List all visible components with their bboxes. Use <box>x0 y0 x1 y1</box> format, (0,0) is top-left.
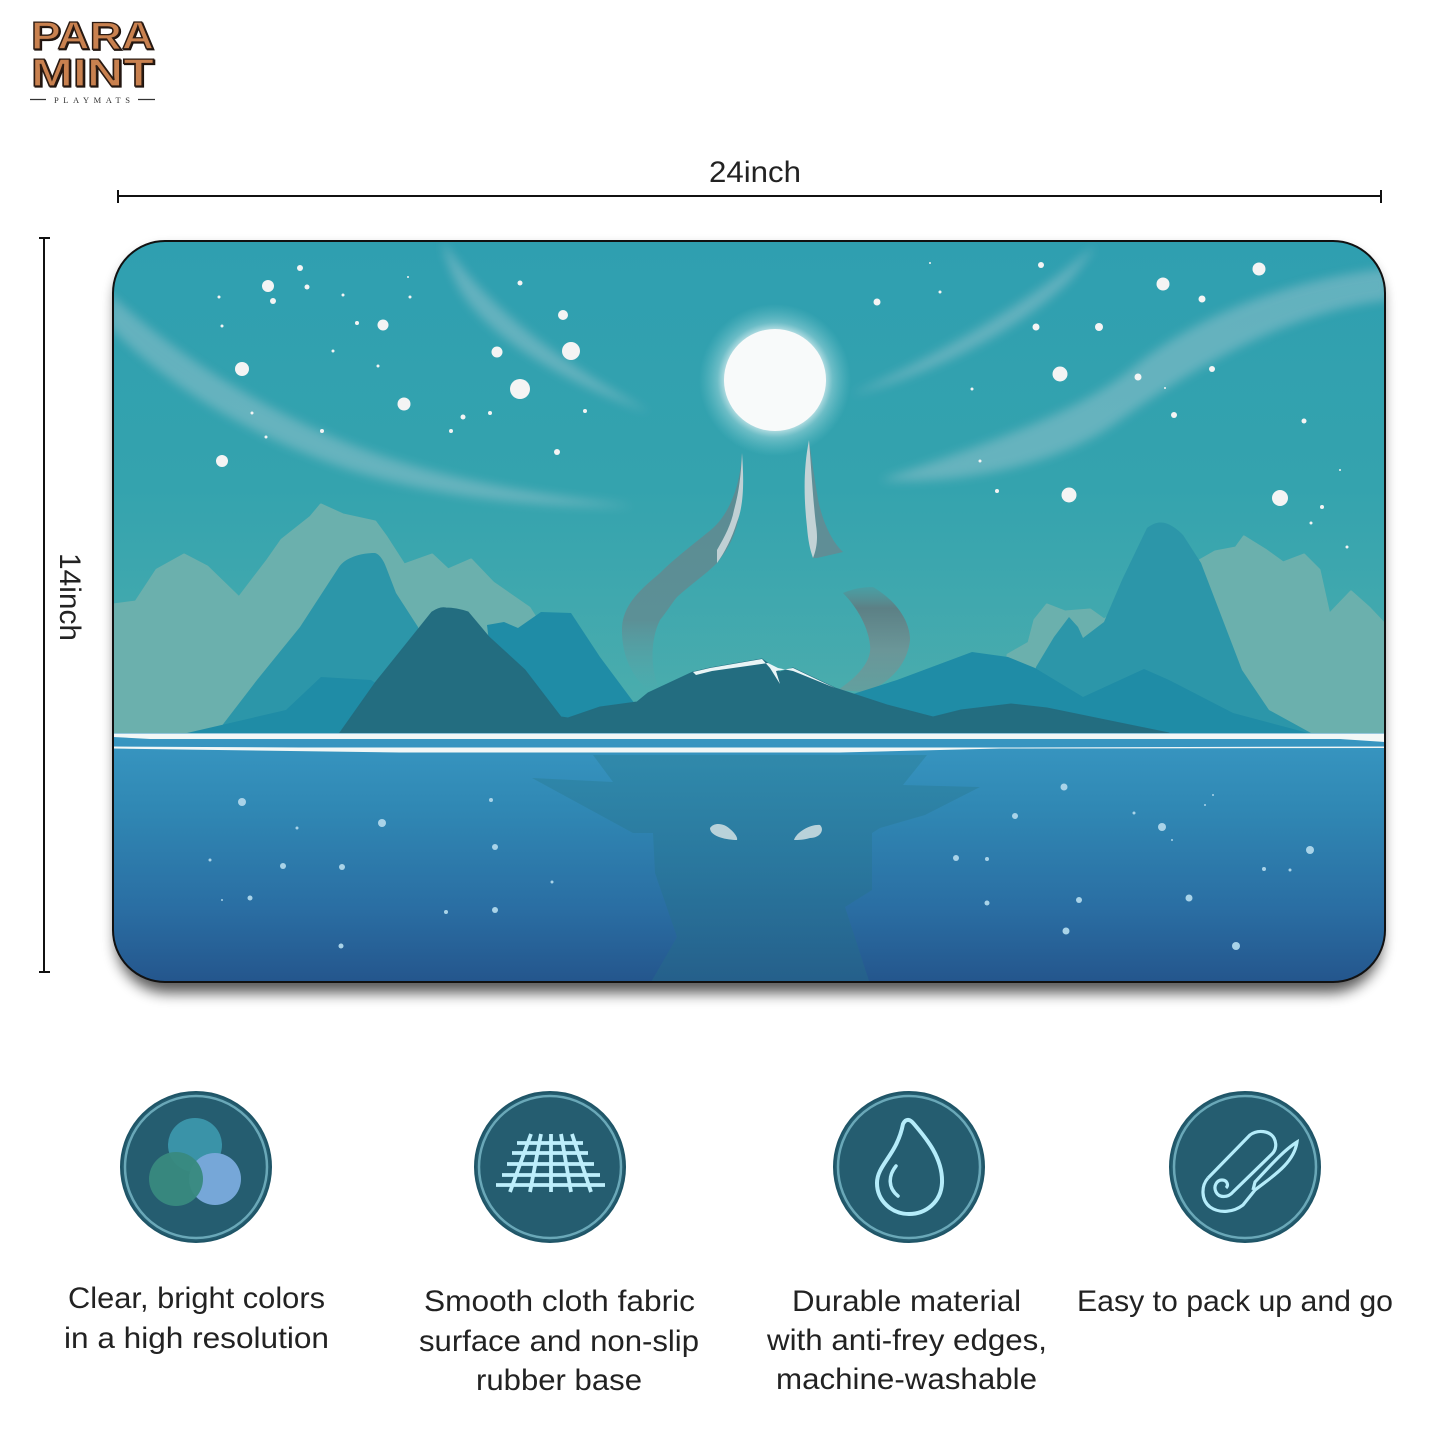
caption: portable: Easy to pack up and go <box>1077 1285 1393 1318</box>
creature reflection <box>532 755 980 984</box>
icon: rolled mat <box>1170 1092 1320 1242</box>
aurora streaks <box>108 240 1390 506</box>
snow on summit <box>693 659 835 688</box>
mid mountain right <box>1020 523 1311 736</box>
sky stars <box>216 262 1348 548</box>
caption: colors: in a high resolution <box>64 1322 329 1355</box>
logo tagline: PLAYMATS <box>54 95 130 105</box>
moon glow <box>699 304 851 456</box>
caption: fabric <box>419 1285 699 1397</box>
icon: water drop <box>834 1092 984 1242</box>
mat drop shadow <box>116 250 1382 993</box>
pale far mountains right <box>1008 537 1385 736</box>
feature: portable <box>1077 1092 1393 1318</box>
mat outline <box>113 241 1385 982</box>
height dimension line <box>39 238 50 972</box>
mid mountain left <box>222 553 418 725</box>
width label: 24inch <box>709 156 801 189</box>
icon: color circles <box>121 1092 271 1242</box>
height label: 14inch <box>53 553 86 641</box>
caption: durable: machine-washable <box>776 1363 1037 1396</box>
dark foreground mountain range <box>339 608 1169 736</box>
caption: durable <box>766 1285 1047 1396</box>
caption: colors: Clear, bright colors <box>68 1282 325 1315</box>
moon <box>724 329 826 431</box>
creature horn ribbons <box>622 440 910 692</box>
water lines <box>113 734 1385 742</box>
feature: fabric <box>419 1092 699 1397</box>
playmat illustration <box>108 240 1390 984</box>
caption: colors <box>64 1282 329 1355</box>
pale far mountains left <box>113 505 540 736</box>
logo: Paramint Playmats <box>30 15 156 105</box>
creature eyes <box>710 824 737 840</box>
caption: fabric: surface and non-slip <box>419 1325 699 1358</box>
width dimension line <box>118 190 1381 203</box>
logo word: PARA: PARA <box>31 15 154 58</box>
sea <box>113 733 1385 984</box>
caption: durable: Durable material <box>792 1285 1021 1318</box>
icon: fabric grid <box>475 1092 625 1242</box>
caption: fabric: Smooth cloth fabric <box>424 1285 695 1318</box>
feature: durable <box>766 1092 1047 1396</box>
sky <box>113 241 1385 736</box>
feature: colors <box>64 1092 329 1355</box>
logo word: MINT: MINT <box>31 52 154 95</box>
front low mountain left <box>188 677 374 733</box>
caption: fabric: rubber base <box>476 1364 642 1397</box>
blue mountain behind peak <box>487 612 634 718</box>
sea stars <box>208 784 1314 950</box>
front mountains right <box>840 652 1308 736</box>
caption: durable: with anti-frey edges, <box>766 1324 1047 1357</box>
